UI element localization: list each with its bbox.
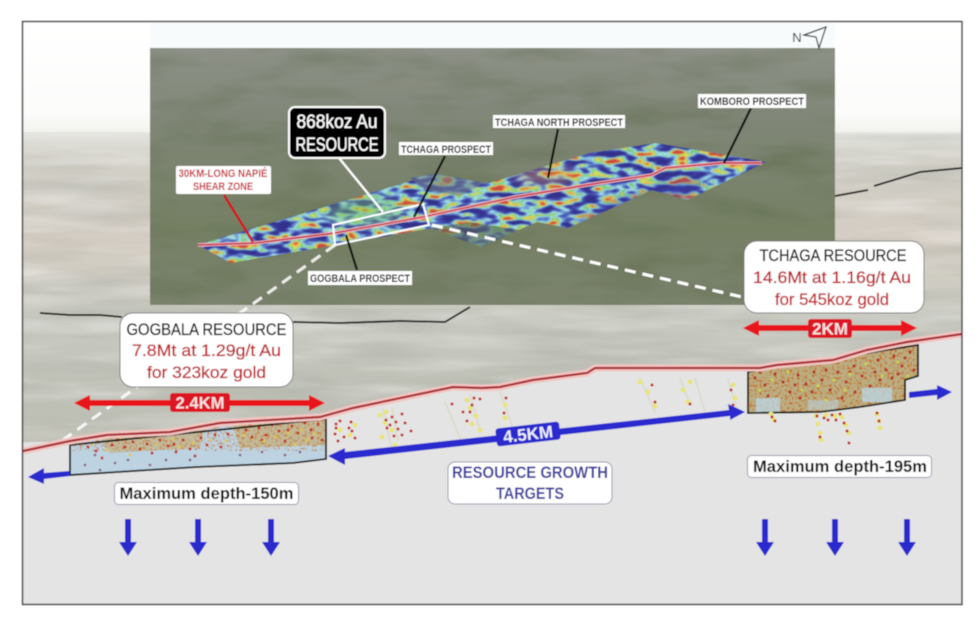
label: Gogbala prospect: GOGBALA PROSPECT — [310, 273, 410, 285]
callout: Gogbala resource — [120, 313, 293, 387]
section: Gogbala resource block — [70, 419, 326, 475]
blue arrow: east extension — [909, 385, 952, 400]
label: shear zone: 30KM-LONG NAPIÉ — [178, 167, 268, 180]
depth arrows: Tchaga — [756, 519, 916, 556]
label: shear zone — [176, 166, 271, 194]
blue arrow: 4.5KM — [328, 404, 745, 465]
drill holes below Tchaga block — [771, 413, 880, 443]
label: 868koz Au resource: 868koz Au — [296, 112, 378, 133]
shear zone trace — [198, 163, 762, 245]
callout: Gogbala resource: 7.8Mt at 1.29g/t Au — [132, 341, 281, 360]
satellite map panel — [150, 23, 835, 305]
red arrow: 2.4KM: 2.4KM — [176, 394, 224, 412]
black horizon lines — [40, 168, 962, 323]
red arrow: 2.4KM — [74, 393, 325, 412]
pointer lines — [224, 108, 751, 270]
subsurface grey panel — [23, 300, 962, 604]
dashed lines to sections — [63, 225, 742, 440]
callout: maximum depth Tchaga: Maximum depth-195m — [753, 458, 927, 476]
callout: maximum depth Gogbala: Maximum depth-150m — [120, 485, 294, 503]
terrain backdrop — [22, 118, 962, 442]
blue arrow: west extension — [28, 468, 70, 484]
label: Tchaga North prospect: TCHAGA NORTH PROSPECT — [495, 117, 623, 129]
geophysics strip — [200, 142, 766, 264]
callout: resource growth targets: TARGETS — [496, 484, 564, 503]
label: 868koz Au resource — [289, 107, 385, 158]
label: shear zone: SHEAR ZONE — [193, 181, 253, 193]
callout: Gogbala resource: GOGBALA RESOURCE — [126, 320, 286, 339]
resource outline box — [333, 204, 429, 245]
drill holes between resources — [335, 378, 738, 450]
label: 868koz Au resource: RESOURCE — [296, 135, 378, 156]
callout: resource growth targets — [448, 462, 612, 504]
label: Tchaga prospect: TCHAGA PROSPECT — [401, 144, 491, 156]
callout: Tchaga resource: TCHAGA RESOURCE — [760, 246, 906, 265]
section: Tchaga resource block — [748, 345, 918, 415]
surface profile line — [23, 334, 962, 451]
red arrow: 2KM: 2KM — [812, 320, 848, 338]
callout: Tchaga resource — [744, 241, 924, 313]
north arrow — [792, 27, 826, 48]
label: Komboro prospect: KOMBORO PROSPECT — [700, 96, 804, 108]
north arrow: N — [792, 30, 802, 45]
depth arrows: Gogbala — [119, 519, 280, 556]
callout: Tchaga resource: 14.6Mt at 1.16g/t Au — [753, 268, 911, 287]
callout: resource growth targets: RESOURCE GROWTH — [452, 463, 608, 482]
callout: Tchaga resource: for 545koz gold — [775, 290, 889, 309]
callout: Gogbala resource: for 323koz gold — [147, 363, 266, 382]
blue arrow: 4.5KM: 4.5KM — [502, 422, 554, 447]
red arrow: 2KM — [743, 319, 917, 338]
